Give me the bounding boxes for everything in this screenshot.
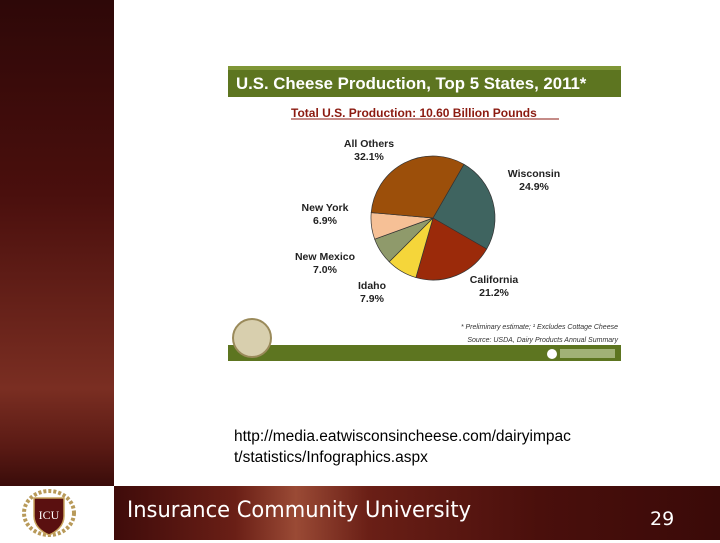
footer bar: [114, 486, 720, 540]
source URL: [234, 428, 571, 466]
footnote: * Preliminary estimate; ¹ Excludes Cottage Cheese: [461, 324, 618, 331]
pie chart: [371, 156, 495, 280]
pie labels: 7.0%: [313, 264, 338, 276]
chart image: [228, 66, 621, 361]
icon: ICU logo: ICU: [39, 508, 60, 522]
pie labels: 32.1%: [354, 151, 385, 163]
pie labels: 21.2%: [479, 287, 510, 299]
icon: cheese seal: [233, 319, 271, 357]
footnote: [461, 324, 618, 344]
header bar: U.S. Cheese Production, Top 5 States, 2011*: [236, 74, 587, 93]
pie labels: Wisconsin: [508, 168, 560, 180]
header bar: [228, 66, 621, 97]
footer green bar: [228, 345, 621, 361]
pie labels: All Others: [344, 138, 394, 150]
pie labels: New York: [302, 202, 349, 214]
pie labels: California: [470, 274, 518, 286]
sidebar: [0, 0, 114, 486]
pie labels: 6.9%: [313, 215, 338, 227]
icon: ICU logo: [22, 489, 76, 537]
page number: 29: [650, 508, 674, 530]
pie labels: [295, 138, 560, 305]
source URL: t/statistics/Infographics.aspx: [234, 449, 428, 466]
pie labels: New Mexico: [295, 251, 355, 263]
subtitle: Total U.S. Production: 10.60 Billion Pounds: [291, 106, 537, 120]
pie labels: 24.9%: [519, 181, 550, 193]
source URL: http://media.eatwisconsincheese.com/dairyimpac: [234, 428, 571, 445]
pie labels: 7.9%: [360, 293, 385, 305]
pie labels: Idaho: [358, 280, 386, 292]
footer title: Insurance Community University: [127, 498, 471, 523]
icon: milk board logo: [547, 349, 615, 359]
footnote: Source: USDA, Dairy Products Annual Summary: [467, 337, 618, 344]
